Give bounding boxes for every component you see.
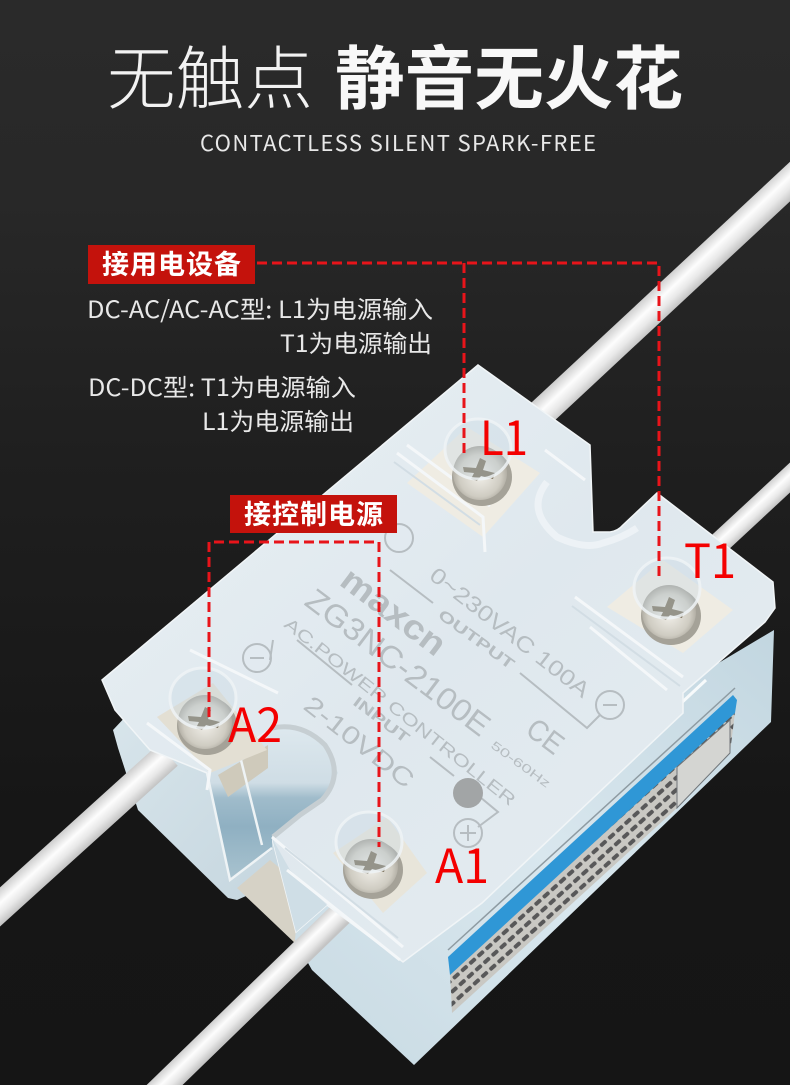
wire: left (0, 755, 168, 925)
wiring note: DC-AC/AC-AC (87, 290, 433, 359)
label: load side: 接用电设备 (102, 243, 241, 282)
wiring note: DC-AC/AC-AC: DC-AC/AC-AC型: L1为电源输入 (87, 290, 433, 325)
brand mark: maxcn (333, 560, 453, 664)
screw A2 (170, 668, 237, 755)
terminal tag: A1: A1 (435, 828, 489, 897)
wire: top right (520, 163, 790, 433)
wire: bottom (145, 905, 350, 1085)
wiring note: DC-DC: L1为电源输出 (202, 402, 354, 437)
metal mounting plate (237, 860, 325, 945)
terminal circles (243, 524, 624, 847)
subtitle: CONTACTLESS SILENT SPARK-FREE (200, 126, 596, 158)
glass edges (207, 760, 272, 880)
metal lug behind glass (218, 745, 268, 797)
wiring note: DC-AC/AC-AC: T1为电源输出 (280, 324, 432, 359)
terminal pad: L1 (407, 427, 540, 537)
product type: AC.POWER CONTROLLER (281, 614, 519, 810)
terminal pad: A1 (333, 817, 427, 913)
body edge highlight (430, 680, 706, 937)
cover grooves (147, 445, 683, 960)
A1 wall glass (272, 838, 327, 932)
output rating: 0~230VAC 100A (425, 562, 595, 703)
printed markings (243, 524, 624, 847)
transparent cover (102, 365, 775, 962)
frequency: 50-60Hz (488, 738, 553, 791)
screw L1 (445, 419, 512, 506)
label: control side: 接控制电源 (244, 493, 383, 532)
groove shadows (285, 462, 680, 938)
indicator LED (453, 778, 483, 808)
notch arc (538, 482, 637, 545)
output label: OUTPUT (435, 606, 517, 673)
title: 静音无火花 (335, 23, 683, 123)
glass wall by the notch (207, 728, 338, 880)
dashed leader: load side (257, 263, 659, 580)
circuit symbols (270, 570, 600, 827)
dashed leader: control side (209, 542, 379, 847)
terminal pad: A2 (157, 683, 267, 773)
CE mark: CE (520, 712, 570, 761)
terminal pad: T1 (607, 560, 733, 653)
wiring note: DC-DC: DC-DC型: T1为电源输入 (88, 368, 356, 403)
screw T1 (634, 558, 701, 645)
screw A1 (336, 812, 403, 899)
body seam (448, 688, 735, 950)
title (107, 23, 683, 123)
notch rim (272, 727, 334, 837)
wiring note: DC-DC (88, 368, 356, 437)
input voltage: 2-10VDC (298, 691, 420, 794)
side sticker (448, 695, 737, 1013)
relay body: left face (113, 680, 305, 900)
wire: right (700, 459, 790, 561)
terminal tag: A2: A2 (228, 687, 282, 756)
relay body: right face (295, 630, 774, 1065)
title: 无触点 (107, 23, 313, 123)
input label: INPUT (350, 694, 413, 747)
terminal tag: T1: T1 (684, 523, 736, 592)
model number: ZG3NC-2100E (299, 582, 497, 743)
terminal tag: L1: L1 (480, 400, 528, 469)
